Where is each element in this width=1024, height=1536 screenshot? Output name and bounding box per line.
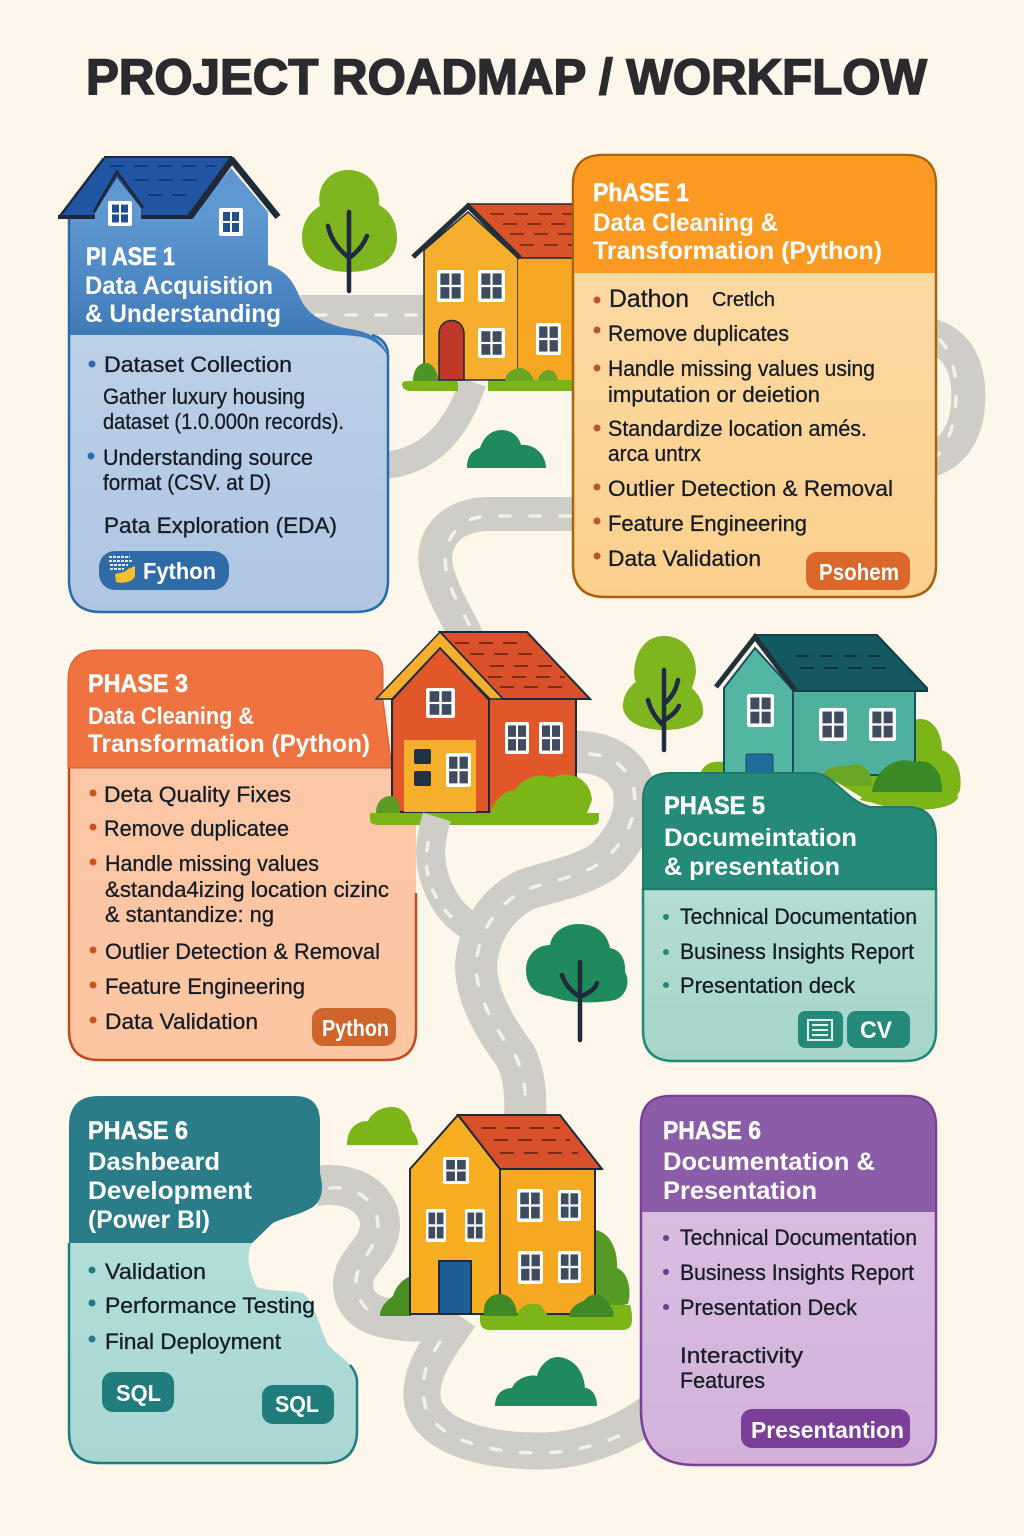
panel: phase 6 documentation [641, 1096, 936, 1465]
panel body [69, 335, 388, 612]
badge: presentation [741, 1409, 910, 1448]
heading: Development [88, 1177, 253, 1205]
body text: Business Insights Report [680, 939, 914, 964]
panel body [641, 1096, 936, 1465]
badge: sql right: SQL [275, 1391, 319, 1417]
body text: Features [680, 1368, 765, 1393]
heading: PHASE 5 [664, 792, 765, 820]
panel: phase 5 documentation [643, 773, 936, 1061]
panel border [69, 1243, 357, 1463]
heading: Transformation (Python) [88, 730, 370, 758]
body text: Handle missing values using [608, 356, 875, 381]
badge: psohem [806, 552, 910, 590]
body text [663, 1225, 917, 1393]
body text: Performance Testing [105, 1293, 315, 1318]
body text: Deta Quality Fixes [104, 782, 291, 807]
body text: Handle missing values [105, 851, 319, 876]
tree: top [302, 170, 397, 291]
house: teal phase 5 [700, 635, 961, 810]
badge: sql left [102, 1372, 174, 1412]
badge: python [312, 1008, 396, 1046]
badge: sql right [262, 1385, 334, 1424]
body text: dataset (1.0.000n records). [103, 409, 344, 434]
badge: psohem: Psohem [819, 559, 899, 585]
heading: & presentation [664, 853, 840, 881]
body text: Validation [105, 1259, 206, 1284]
road: below red house [426, 817, 472, 927]
panel body [69, 768, 416, 1060]
body text: imputation or deietion [608, 382, 820, 407]
panel body [69, 1243, 357, 1463]
body text: Business Insights Report [680, 1260, 914, 1285]
heading [663, 1117, 875, 1205]
icon: blue house roof [58, 157, 278, 236]
body text [594, 285, 893, 571]
body text: & stantandize: ng [105, 902, 274, 927]
panel: phase 1 data acquisition [58, 157, 388, 612]
panel header [642, 1097, 935, 1212]
body text: Presentation deck [680, 973, 856, 998]
house: yellow phase 1 [402, 204, 578, 391]
body text: Technical Documentation [680, 1225, 917, 1250]
heading: & Understanding [85, 300, 281, 328]
body text [90, 782, 389, 1034]
bush: dark green upper [467, 430, 546, 468]
body text: Standardize location amés. [608, 416, 867, 441]
heading: Data Acquisition [85, 272, 273, 300]
roads network [285, 315, 968, 1453]
house: red phase 3 [370, 632, 599, 825]
tree: middle light [623, 636, 703, 750]
heading: Data Cleaning & [593, 209, 778, 237]
panel: phase 1 data cleaning [573, 155, 936, 597]
body text: Data Validation [608, 546, 761, 571]
heading [85, 243, 281, 328]
heading: Documeintation [664, 824, 857, 852]
heading: PI ASE 1 [86, 243, 175, 271]
body text: arca untrx [608, 441, 701, 466]
panel header [69, 1096, 322, 1243]
body text: Feature Engineering [105, 974, 305, 999]
body text: Technical Documentation [680, 904, 917, 929]
heading: (Power BI) [88, 1206, 210, 1234]
badge: python [99, 551, 229, 590]
title: PROJECT ROADMAP / WORKFLOW [86, 49, 928, 105]
body text: Final Deployment [105, 1329, 281, 1354]
panel header [643, 773, 936, 889]
badge: python: Python [322, 1015, 389, 1041]
badge: cv [847, 1011, 910, 1048]
body text [88, 1259, 315, 1354]
badge: report icon [798, 1011, 843, 1048]
body text: Data Validation [105, 1009, 258, 1034]
heading: PHASE 3 [88, 670, 188, 698]
tree: lower dark [526, 924, 628, 1040]
heading: PHASE 6 [663, 1117, 761, 1145]
heading [88, 670, 370, 758]
body text: Dataset Collection [104, 352, 292, 377]
heading: Data Cleaning & [88, 703, 254, 730]
body text: Understanding source [103, 445, 313, 470]
body text: Outlier Detection & Removal [105, 939, 380, 964]
panel header [68, 215, 388, 356]
panel border [69, 216, 388, 612]
heading: PHASE 6 [88, 1117, 188, 1145]
heading [88, 1117, 253, 1234]
heading: Dashbeard [88, 1148, 220, 1176]
body text [663, 904, 917, 998]
heading: Transformation (Python) [593, 237, 882, 265]
bush: light green lower [347, 1107, 418, 1145]
body text: Remove duplicatee [104, 816, 289, 841]
body text: Feature Engineering [608, 511, 807, 536]
panel: phase 3 [68, 650, 416, 1060]
body text: &standa4izing location cizinc [105, 877, 389, 902]
body text: Pata Exploration (EDA) [104, 513, 337, 538]
heading [593, 179, 882, 265]
body text: Presentation Deck [680, 1295, 858, 1320]
badge: presentation: Presentantion [751, 1417, 904, 1443]
panel border [69, 680, 416, 1060]
panel body [573, 155, 936, 597]
badge: python: Fython [143, 558, 216, 584]
panel body [643, 889, 936, 1061]
body text: Dathon [609, 285, 689, 313]
body text: Remove duplicates [608, 321, 789, 346]
body text [88, 352, 344, 538]
panel header [68, 650, 392, 768]
body text: Gather luxury housing [103, 384, 305, 409]
heading: Documentation & [663, 1148, 875, 1176]
bush: dark green lower [495, 1357, 597, 1406]
body text: Cretlch [712, 289, 775, 311]
panel header [574, 156, 935, 273]
body text: format (CSV. at D) [103, 470, 271, 495]
heading: Presentation [663, 1177, 817, 1205]
body text: Outlier Detection & Removal [608, 476, 893, 501]
heading [664, 792, 857, 881]
house: yellow bottom [380, 1115, 632, 1330]
panel: phase 6 dashboard [69, 1096, 357, 1463]
body text: Interactivity [680, 1343, 803, 1368]
badge: sql left: SQL [116, 1380, 161, 1406]
badge: cv: CV [860, 1017, 892, 1044]
heading: PhASE 1 [593, 179, 689, 207]
